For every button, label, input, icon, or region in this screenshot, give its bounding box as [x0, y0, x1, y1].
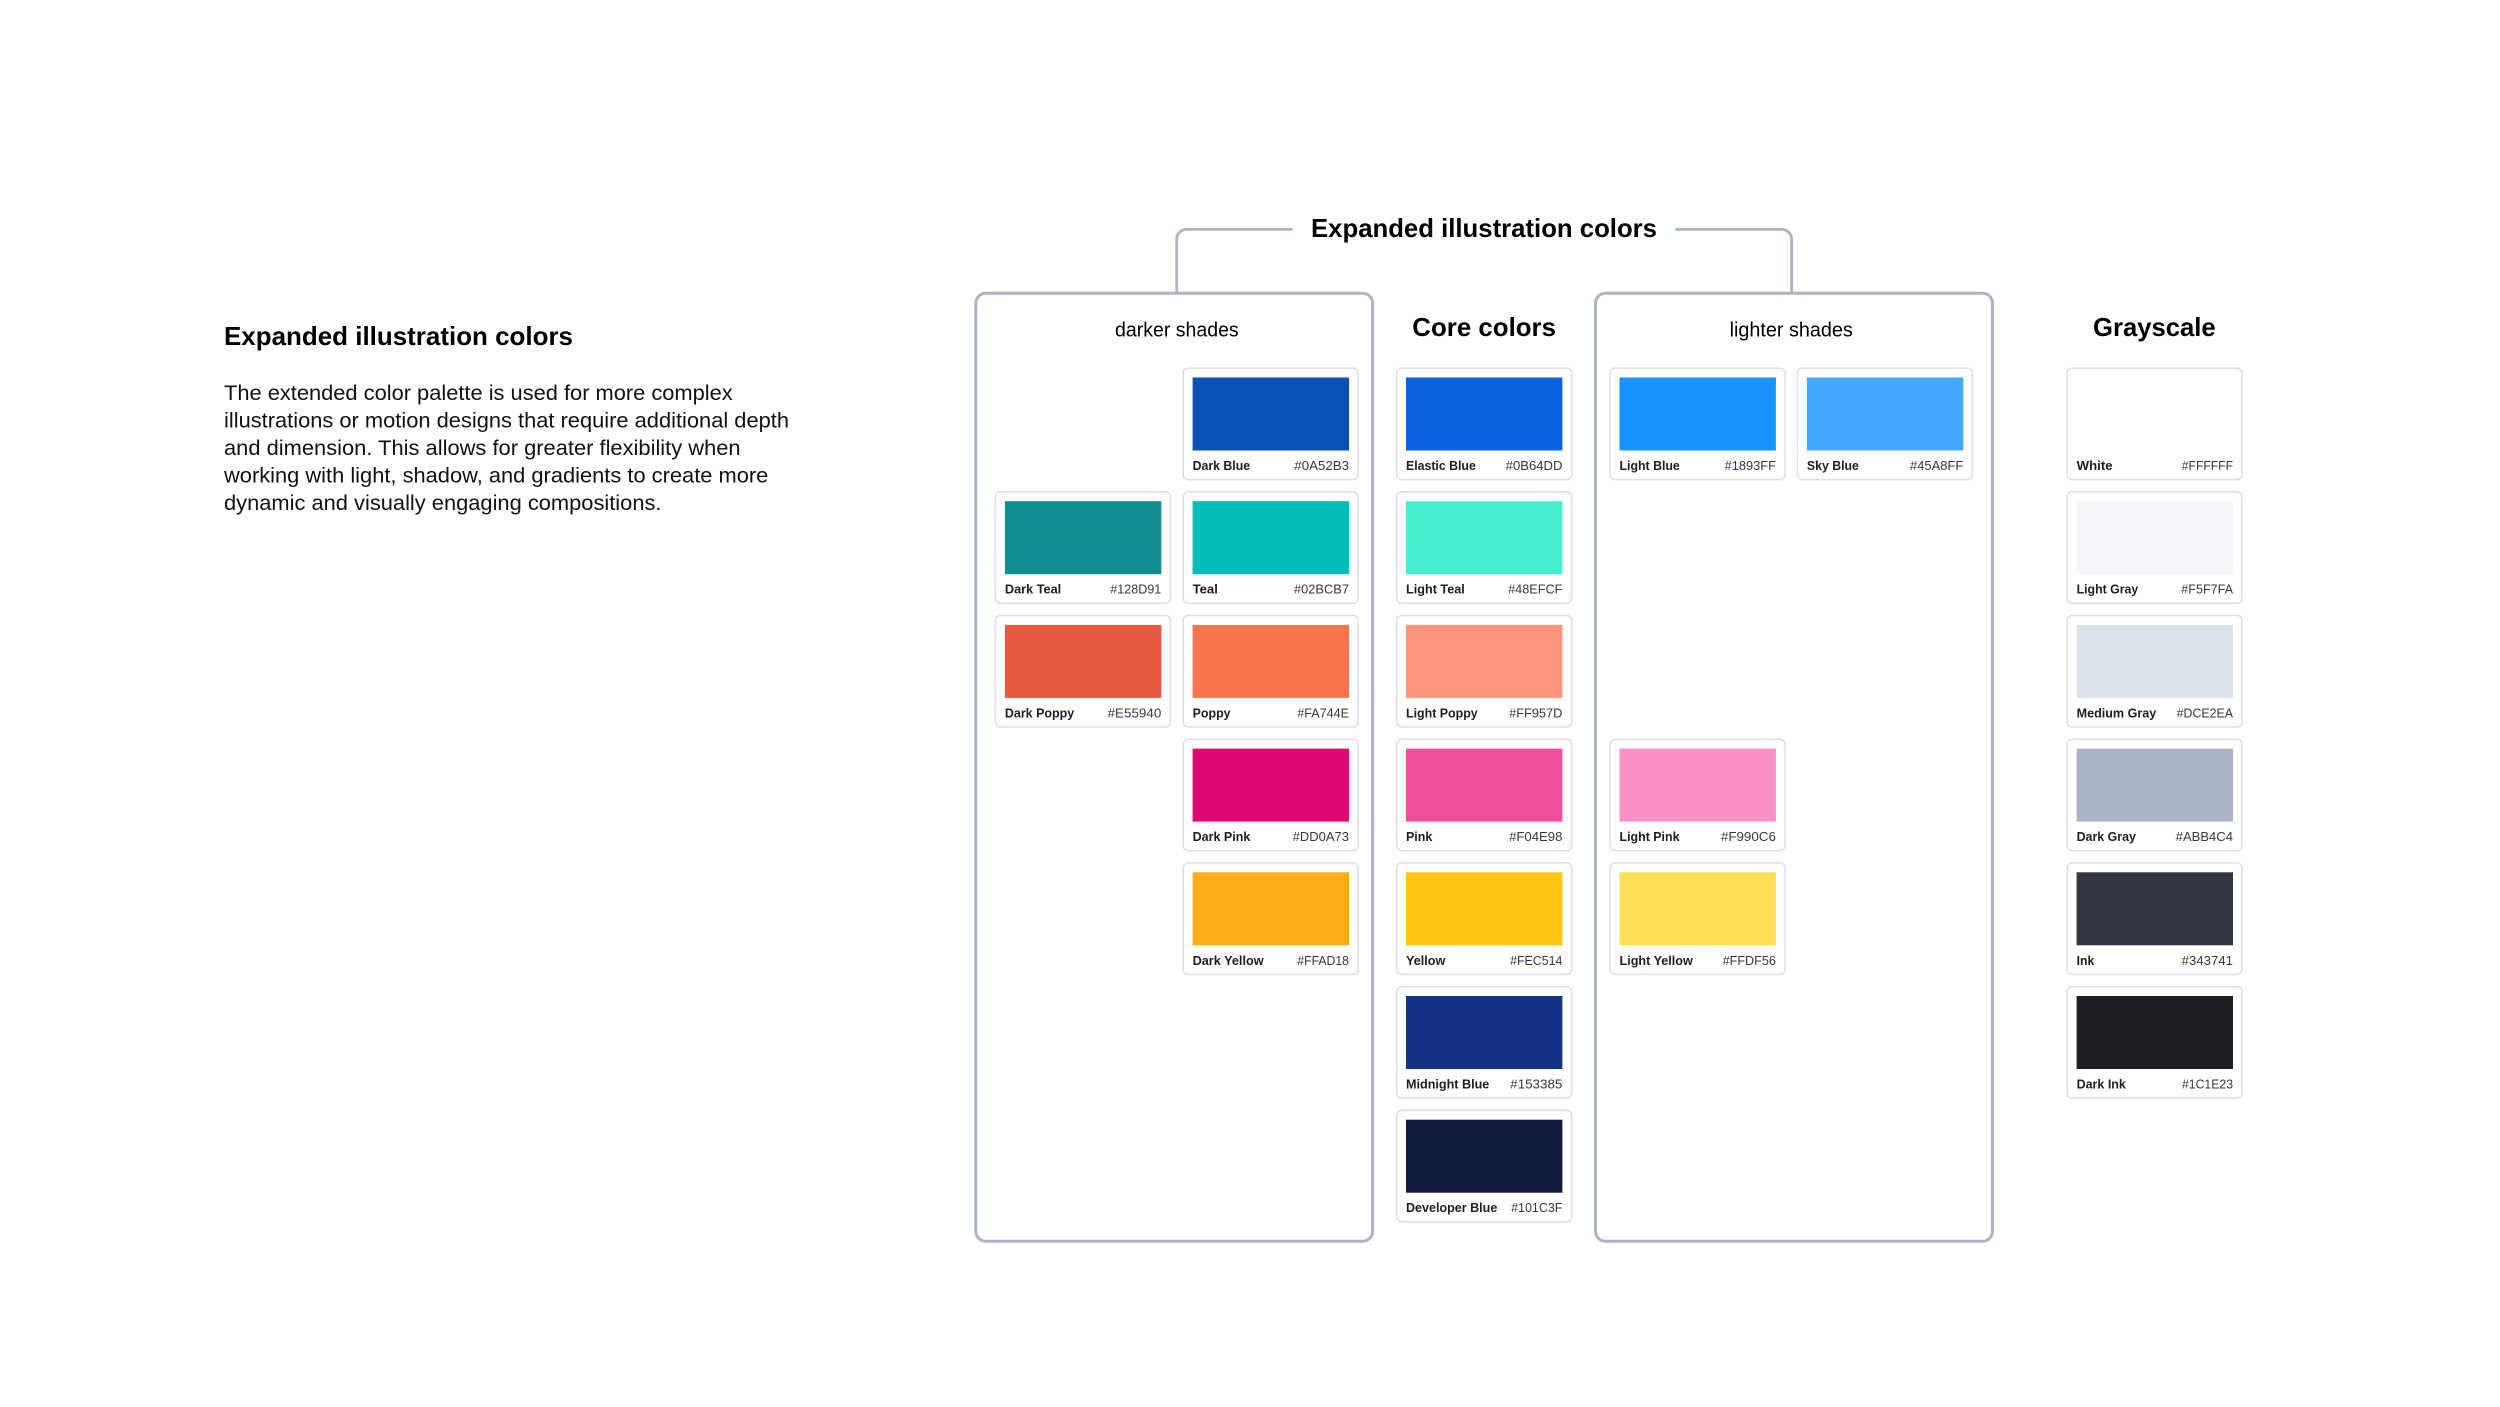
swatch: Dark Yellow: #FFAD18 [1297, 954, 1349, 968]
swatch: Dark Blue: Dark Blue [1193, 459, 1250, 473]
swatch: Poppy: #FA744E [1297, 706, 1349, 720]
swatch: White: #FFFFFF [2182, 459, 2233, 473]
swatch: Midnight Blue: #153385 [1510, 1078, 1562, 1092]
swatch: Light Poppy: Light Poppy [1406, 706, 1478, 720]
swatch: Yellow [1397, 863, 1572, 974]
panel: darker shades [976, 293, 1373, 1241]
swatch: Developer Blue: Developer Blue [1406, 1201, 1497, 1215]
swatch: Dark Poppy [996, 616, 1170, 727]
swatch: Light Poppy: #FF957D [1509, 706, 1562, 720]
swatch: Light Yellow: Light Yellow [1620, 954, 1693, 968]
swatch: Light Yellow: #FFDF56 [1723, 954, 1776, 968]
swatch: Teal: Teal [1193, 583, 1218, 597]
swatch: Developer Blue: #101C3F [1511, 1201, 1563, 1215]
swatch: Light Teal [1397, 492, 1572, 603]
swatch: White: White [2077, 459, 2113, 473]
swatch: Light Gray: Light Gray [2077, 583, 2138, 597]
swatch: Teal: #02BCB7 [1294, 583, 1349, 597]
swatch: White [2067, 368, 2242, 480]
panel heading: darker shades: darker shades [1115, 320, 1239, 342]
swatch: Dark Teal: #128D91 [1110, 583, 1161, 597]
swatch: Dark Teal: Dark Teal [1005, 583, 1061, 597]
swatch: Light Yellow [1610, 863, 1785, 974]
swatch: Dark Teal [996, 492, 1170, 603]
column heading: grayscale: Grayscale [2093, 312, 2216, 342]
swatch: Dark Gray [2067, 739, 2242, 851]
swatch: Sky Blue [1798, 368, 1972, 480]
swatch: Medium Gray: #DCE2EA [2177, 706, 2234, 720]
swatch: Ink: #343741 [2182, 954, 2233, 968]
swatch: Sky Blue: Sky Blue [1807, 459, 1859, 473]
swatch: Dark Gray: #ABB4C4 [2176, 830, 2233, 844]
swatch: Dark Blue: #0A52B3 [1294, 459, 1349, 473]
swatch: Light Blue: #1893FF [1725, 459, 1776, 473]
swatch: Light Blue [1610, 368, 1785, 480]
panel: lighter shades [1596, 293, 1992, 1241]
description text block: working with light, shadow, and gradients to create more [223, 464, 768, 487]
column heading: core colors: Core colors [1412, 312, 1556, 342]
swatch: Dark Yellow: Dark Yellow [1193, 954, 1264, 968]
swatch: Dark Poppy: #E55940 [1108, 706, 1161, 720]
swatch: Ink [2067, 863, 2242, 974]
swatch: Sky Blue: #45A8FF [1910, 459, 1964, 473]
description text block [223, 382, 789, 515]
swatch: Yellow: #FEC514 [1510, 954, 1562, 968]
connector: heading to lighter shades [1675, 229, 1792, 293]
swatch: Pink: #F04E98 [1509, 830, 1562, 844]
swatch: Pink [1397, 739, 1572, 851]
column: core colors [1397, 312, 1572, 1222]
swatch: Medium Gray: Medium Gray [2077, 706, 2156, 720]
swatch: Dark Pink: Dark Pink [1193, 830, 1250, 844]
swatch: Dark Poppy: Dark Poppy [1005, 706, 1074, 720]
swatch: Dark Blue [1183, 368, 1358, 480]
swatch: Elastic Blue [1397, 368, 1572, 480]
swatch: Developer Blue [1397, 1110, 1572, 1222]
swatch: Dark Pink [1183, 739, 1358, 851]
swatch: Dark Pink: #DD0A73 [1293, 830, 1349, 844]
swatch: Light Pink [1610, 739, 1785, 851]
swatch: Midnight Blue: Midnight Blue [1406, 1078, 1489, 1092]
swatch: Yellow: Yellow [1406, 954, 1446, 968]
swatch: Light Blue: Light Blue [1620, 459, 1680, 473]
swatch: Light Gray [2067, 492, 2242, 603]
description text block: and dimension. This allows for greater flexibility when [224, 437, 741, 460]
swatch: Teal [1183, 492, 1358, 603]
swatch: Dark Yellow [1183, 863, 1358, 974]
swatch: Dark Ink: Dark Ink [2077, 1078, 2126, 1092]
description text block: The extended color palette is used for more complex [224, 382, 733, 405]
swatch: Ink: Ink [2077, 954, 2094, 968]
description text block: dynamic and visually engaging compositions. [224, 492, 662, 515]
swatch: Light Teal: Light Teal [1406, 583, 1465, 597]
swatch: Elastic Blue: #0B64DD [1506, 459, 1562, 473]
swatch: Pink: Pink [1406, 830, 1432, 844]
description text block: illustrations or motion designs that require additional depth [224, 410, 789, 432]
connector: heading to darker shades [1177, 229, 1293, 293]
panel heading: lighter shades: lighter shades [1730, 320, 1853, 342]
swatch: Light Teal: #48EFCF [1508, 583, 1563, 597]
swatch: Poppy: Poppy [1193, 706, 1231, 720]
column: grayscale [2067, 312, 2242, 1098]
swatch: Light Poppy [1397, 616, 1572, 727]
swatch: Medium Gray [2067, 616, 2242, 727]
left heading: Expanded illustration colors [224, 321, 573, 351]
swatch: Dark Ink [2067, 987, 2242, 1098]
swatch: Poppy [1183, 616, 1358, 727]
swatch: Dark Gray: Dark Gray [2077, 830, 2136, 844]
top heading: expanded illustration colors: Expanded illustration colors [1311, 213, 1657, 243]
swatch: Dark Ink: #1C1E23 [2182, 1078, 2233, 1092]
swatch: Light Pink: #F990C6 [1721, 830, 1776, 844]
swatch: Midnight Blue [1397, 987, 1572, 1098]
swatch: Elastic Blue: Elastic Blue [1406, 459, 1476, 473]
swatch: Light Pink: Light Pink [1620, 830, 1680, 844]
swatch: Light Gray: #F5F7FA [2181, 583, 2234, 597]
